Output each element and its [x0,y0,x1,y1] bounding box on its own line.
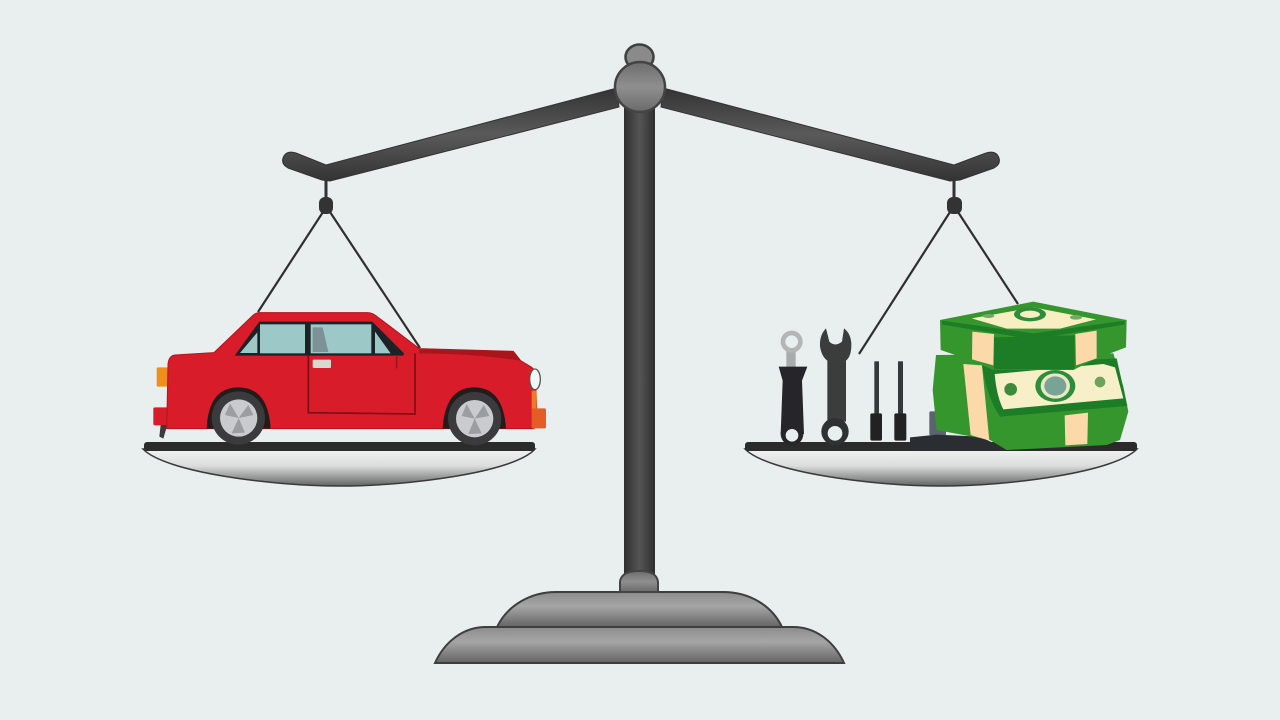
tool: small socket and tray [910,411,1007,449]
right pan [745,442,1137,486]
central post [620,100,658,592]
car door [308,353,415,414]
red car [153,313,546,445]
car front wheel [443,387,506,445]
cash: lower stack [933,353,1128,450]
car rear lights and bumper [153,367,168,439]
pivot hub and top knob [615,44,665,112]
right hanger cords [859,180,1018,354]
car headlight and front corner [530,369,546,428]
base: stepped foot [435,592,844,663]
car body [167,313,537,429]
beam: right arm [661,88,999,181]
repair tools and cash stack [779,302,1128,450]
left hanger cords [258,180,420,348]
car hood crease [419,349,521,361]
left pan [143,442,535,486]
tool: eye bolt handle [779,333,807,445]
tool: screwdrivers [870,361,906,441]
car windows [235,322,404,356]
tool: wrench [820,328,851,445]
beam: left arm [283,88,619,181]
cash: upper stack [940,302,1127,370]
car rear wheel [207,387,271,445]
